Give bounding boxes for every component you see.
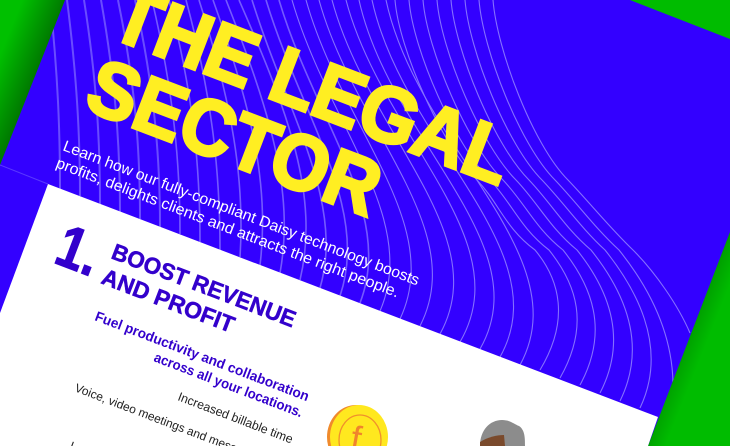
subtitle: profits, delights clients and attracts the right people. [54,155,402,301]
green backdrop: right [648,232,730,446]
section heading: AND PROFIT [98,263,238,338]
icon: person with grey hair [480,420,525,446]
subtitle: Learn how our fully-compliant Daisy technology boosts [61,138,422,289]
green backdrop: top right [630,0,730,39]
section heading: BOOST REVENUE [108,238,300,332]
section subheading: Fuel productivity and collaboration [93,308,312,404]
section number: 1. [47,212,111,289]
section subheading: across all your locations. [152,349,305,420]
page edge crease [0,165,48,184]
white content panel [0,184,658,446]
body text: Increased billable time [176,390,295,446]
green backdrop: top left [0,0,65,165]
icon: pound coin [327,405,388,446]
title: SECTOR [76,41,394,233]
